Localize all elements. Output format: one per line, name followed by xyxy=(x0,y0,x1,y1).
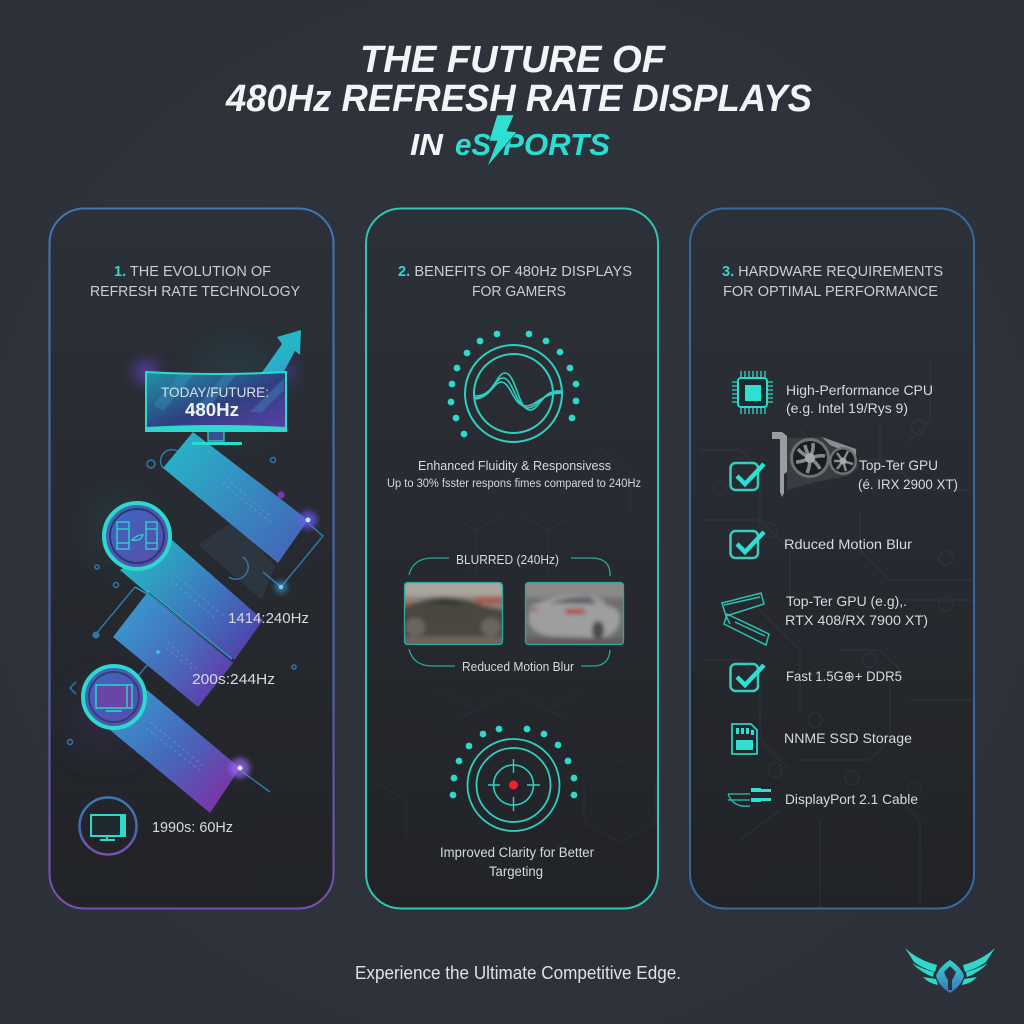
title: THE FUTURE OF xyxy=(360,39,667,81)
icon: lightning bolt xyxy=(487,115,517,167)
image: sharp car xyxy=(526,583,623,644)
brackets xyxy=(409,558,610,666)
bar: 2010s segment xyxy=(120,540,263,662)
label: 60Hz: 1990s: 60Hz xyxy=(152,819,233,836)
text: GPU: (é. IRX 2900 XT) xyxy=(858,476,958,492)
panel: hardware requirements xyxy=(690,208,974,908)
label: reduced motion blur: Reduced Motion Blur xyxy=(462,659,575,674)
title: 480Hz REFRESH RATE DISPLAYS xyxy=(225,78,812,120)
text: improved clarity: Improved Clarity for Better xyxy=(440,845,594,860)
motion blur comparison xyxy=(400,552,630,674)
monitor: today/future 480Hz: TODAY/FUTURE: xyxy=(161,384,269,400)
text: DDR5: Fast 1.5G⊕+ DDR5 xyxy=(786,668,902,684)
panel: evolution of refresh rate technology xyxy=(50,208,334,908)
bar circuit patterns xyxy=(146,478,272,772)
icon: checkbox 2 xyxy=(730,531,764,558)
image: blurred car xyxy=(405,583,502,644)
text: SSD: NNME SSD Storage xyxy=(784,730,912,746)
image: graphics card xyxy=(772,432,858,497)
timeline decorations xyxy=(68,450,323,792)
monitor: today/future 480Hz: 480Hz xyxy=(185,400,239,420)
label: 244Hz: 200s:244Hz xyxy=(192,671,275,688)
panel 1 heading: 1. THE EVOLUTION OF xyxy=(114,263,271,280)
text: reduced motion blur: Rduced Motion Blur xyxy=(784,536,912,552)
label: blurred: BLURRED (240Hz) xyxy=(456,552,559,567)
icon: CPU xyxy=(732,371,773,414)
text: GPU xyxy=(858,457,958,492)
arrow: rising trend xyxy=(225,330,301,425)
text: cable: DisplayPort 2.1 Cable xyxy=(785,791,918,807)
bar: 2000s segment xyxy=(113,590,234,707)
title: IN xyxy=(410,127,444,162)
icon: fluidity wave xyxy=(448,331,579,442)
text: enhanced fluidity: Up to 30% fsster respons fimes compared to 240Hz xyxy=(387,478,641,490)
text: enhanced fluidity xyxy=(387,458,641,490)
bar: top segment xyxy=(163,432,308,563)
icon: devices circle xyxy=(104,503,170,569)
text: improved clarity xyxy=(440,845,594,879)
title: PORTS xyxy=(503,127,610,162)
logo: winged emblem xyxy=(905,948,995,993)
panel 3 heading: 3. HARDWARE REQUIREMENTS xyxy=(722,263,943,280)
footer tagline: Experience the Ultimate Competitive Edge. xyxy=(355,963,681,983)
icon: cable xyxy=(728,788,771,806)
text: GPU: Top-Ter GPU xyxy=(859,457,938,473)
panel 2 heading xyxy=(398,263,632,300)
text: CPU: (e.g. Intel 19/Rys 9) xyxy=(786,400,908,416)
panel 3 heading: FOR OPTIMAL PERFORMANCE xyxy=(723,283,938,300)
icon: target crosshair xyxy=(450,726,577,831)
icon: CRT monitor circle xyxy=(80,798,136,854)
monitor: today/future 480Hz xyxy=(136,362,294,445)
icon: checkbox 1 xyxy=(730,463,764,490)
glow nodes xyxy=(156,511,317,778)
title: eS xyxy=(455,127,491,162)
panel 2 heading: 2. BENEFITS OF 480Hz DISPLAYS xyxy=(398,263,632,280)
panel 1 heading: REFRESH RATE TECHNOLOGY xyxy=(90,283,300,300)
text: enhanced fluidity: Enhanced Fluidity & Responsivess xyxy=(418,458,611,473)
bar: 1990s segment xyxy=(110,690,240,813)
text: GPU memory line: RTX 408/RX 7900 XT) xyxy=(785,612,928,628)
panel 2 heading: FOR GAMERS xyxy=(472,283,566,300)
text: GPU memory line: Top-Ter GPU (e.g),. xyxy=(786,593,907,609)
icon: SSD card xyxy=(732,724,757,754)
icon: checkbox 3 xyxy=(730,664,764,691)
glow behind timeline xyxy=(75,340,280,750)
title xyxy=(225,39,812,162)
icon: monitor circle xyxy=(83,666,145,728)
panel 1 heading xyxy=(90,263,300,300)
panel: benefits of 480Hz displays xyxy=(366,208,658,908)
text: CPU: High-Performance CPU xyxy=(786,382,933,398)
label: 240Hz: 1414:240Hz xyxy=(228,610,309,627)
panel 3 heading xyxy=(722,263,943,300)
text: GPU memory line xyxy=(785,593,928,628)
text: improved clarity: Targeting xyxy=(489,864,543,879)
text: CPU xyxy=(786,382,933,416)
icon: RAM modules xyxy=(722,593,769,645)
